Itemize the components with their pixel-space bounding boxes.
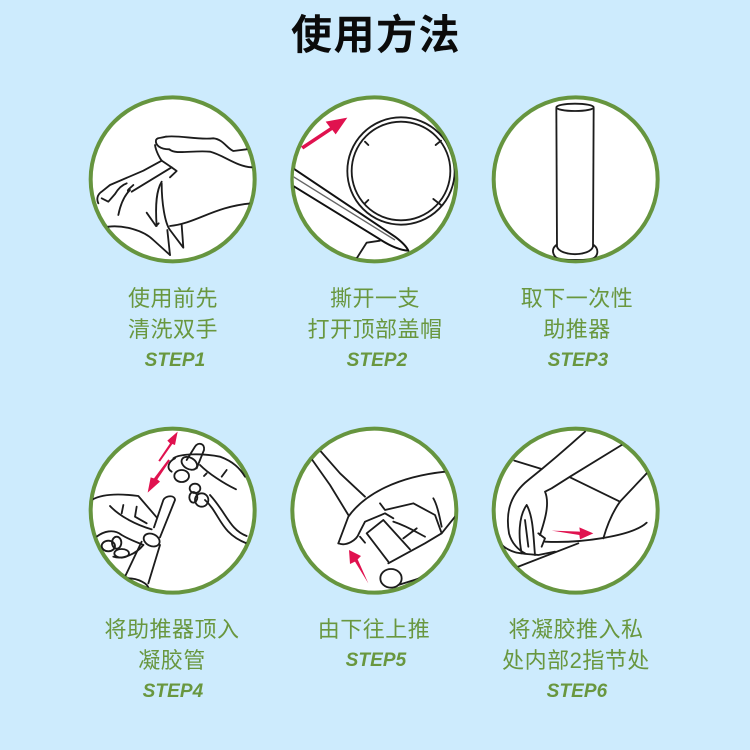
icon: applicator tube [494, 97, 658, 261]
caption: step 5: STEP5 [346, 650, 407, 671]
caption: step 5 [318, 617, 430, 671]
caption: step 3: 取下一次性 [521, 286, 633, 311]
panel: step 4 insert applicator [91, 429, 255, 702]
arrow: up left [349, 550, 368, 583]
title: 使用方法 [291, 12, 461, 58]
icon: applicator tip and ring [292, 97, 456, 261]
caption: step 1: 清洗双手 [128, 317, 218, 342]
panel: step 2 open cap [292, 97, 456, 371]
caption: step 4: STEP4 [143, 681, 204, 702]
caption: step 2: 撕开一支 [330, 286, 420, 311]
icon: hand holding tube [292, 429, 456, 593]
caption: step 6: 将凝胶推入私 [508, 617, 644, 642]
caption: step 1: STEP1 [145, 350, 205, 371]
caption: step 5: 由下往上推 [318, 617, 430, 642]
caption: step 4 [104, 617, 240, 702]
caption: step 4: 凝胶管 [138, 648, 206, 673]
caption: step 3: 助推器 [543, 317, 611, 342]
panel: step 5 push upward [292, 429, 456, 671]
caption: step 6: 处内部2指节处 [502, 648, 650, 673]
caption: step 1: 使用前先 [128, 286, 218, 311]
icon: hands being washed [91, 97, 255, 261]
caption: step 2 [307, 286, 443, 371]
caption: step 4: 将助推器顶入 [104, 617, 240, 642]
panel: step 3 take applicator [494, 97, 658, 371]
caption: step 2: STEP2 [347, 350, 408, 371]
arrow: pointing right [552, 527, 593, 539]
arrow: pointing down [148, 459, 170, 493]
caption: step 3 [521, 286, 633, 371]
caption: step 2: 打开顶部盖帽 [307, 317, 443, 342]
caption: step 6: STEP6 [547, 681, 608, 702]
panel: step 1 wash hands [91, 97, 255, 371]
caption: step 3: STEP3 [548, 350, 609, 371]
arrow: pointing up [158, 432, 178, 462]
icon: hands joining applicator and tube [91, 429, 255, 593]
panel: step 6 insert gel [494, 429, 658, 702]
caption: step 1 [128, 286, 218, 371]
caption: step 6 [502, 617, 650, 702]
arrow: up right [301, 118, 347, 149]
icon: hand inserting applicator [494, 429, 658, 593]
